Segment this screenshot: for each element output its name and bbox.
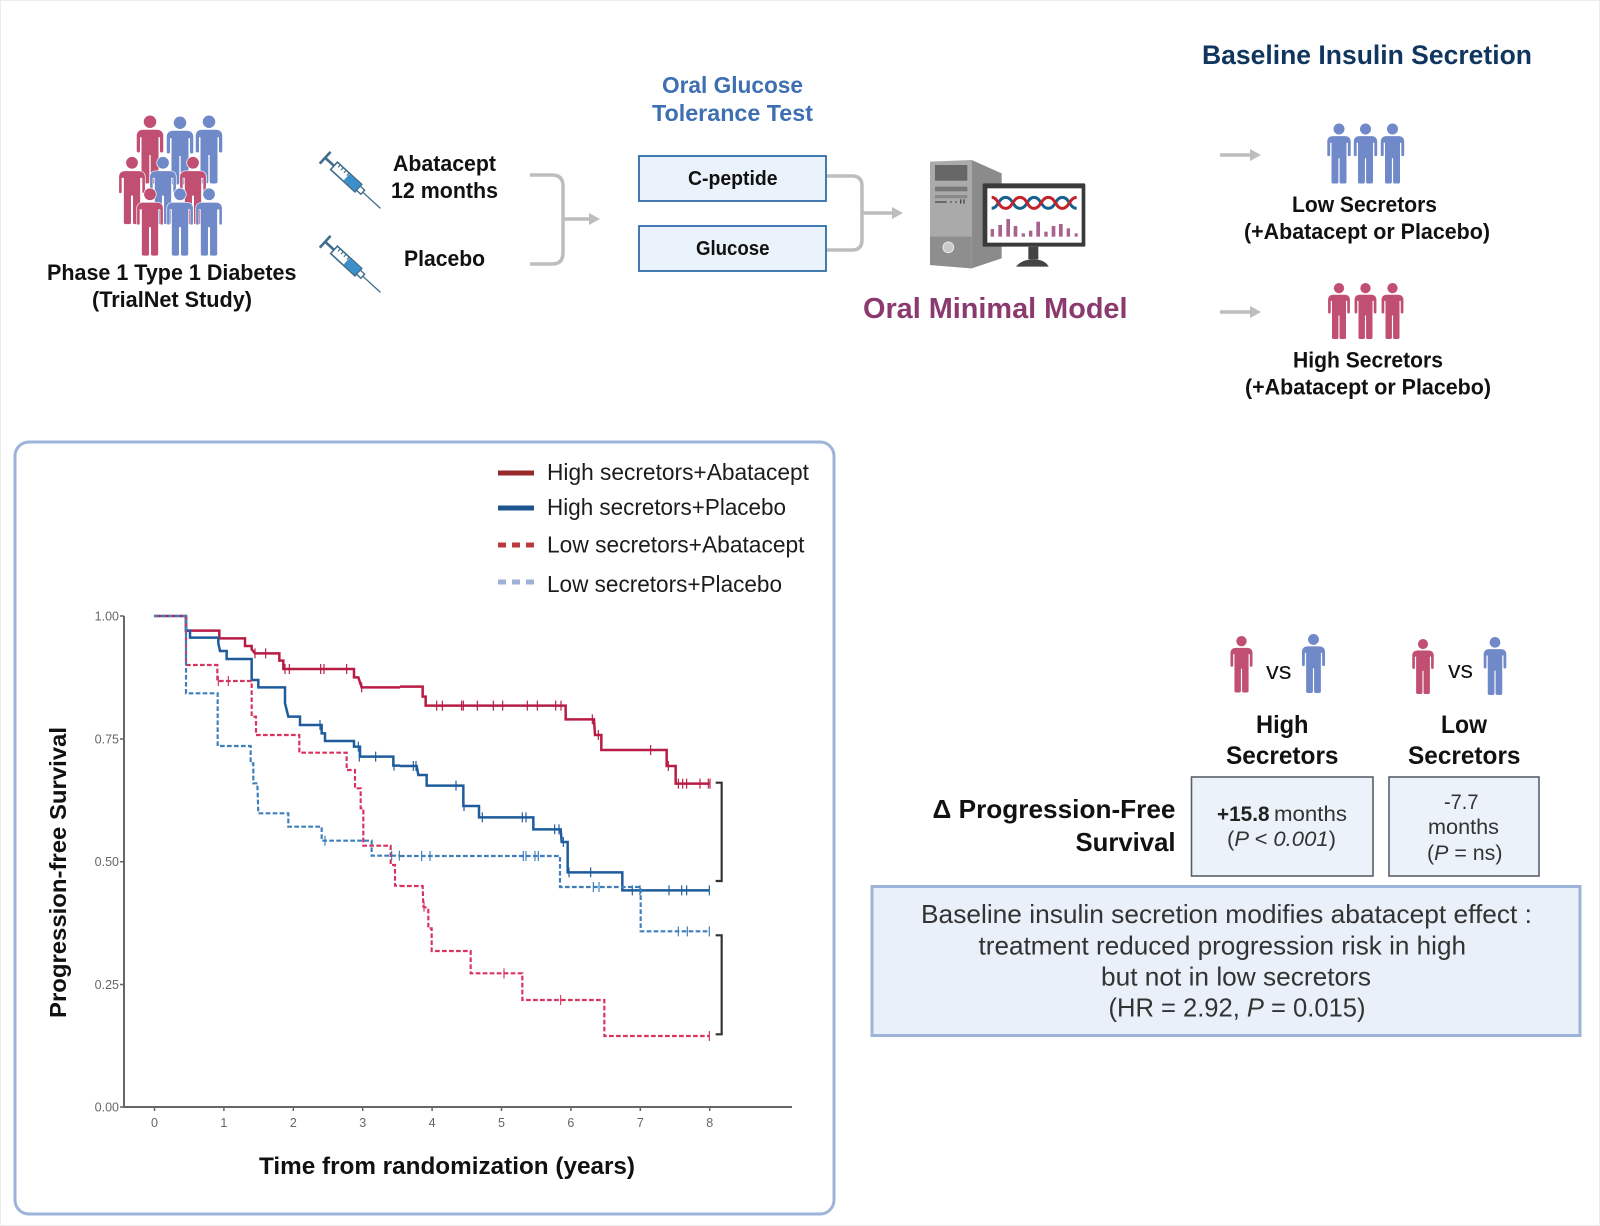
chart axes: 6 [567, 1116, 574, 1130]
heading: high secretors column [1226, 711, 1338, 770]
heading: high secretors column: High [1256, 711, 1308, 739]
arrow: OGTT to model [827, 176, 903, 250]
legend: High secretors+Abatacept [547, 459, 810, 485]
bracket: low secretors comparison [716, 935, 722, 1034]
chart axes: 0.25 [95, 978, 119, 992]
chart axes: 4 [429, 1116, 436, 1130]
y axis title: Progression-free Survival [45, 727, 71, 1018]
bracket: high secretors comparison [716, 783, 722, 881]
callout: conclusion [872, 886, 1580, 1036]
chart axes: 7 [637, 1116, 644, 1130]
row label: delta progression-free survival [932, 794, 1176, 857]
text: study population: (TrialNet Study) [92, 287, 252, 312]
chart axes: 8 [706, 1116, 713, 1130]
chart axes: 2 [290, 1116, 297, 1130]
text: abatacept arm: 12 months [391, 178, 498, 203]
box: high secretors result: +15.8 [1217, 803, 1270, 826]
icon: high secretors abatacept vs placebo [1230, 634, 1325, 693]
chart axes: 1.00 [95, 610, 119, 624]
box: high secretors result: months [1274, 803, 1347, 826]
heading: oral glucose tolerance test: Oral Glucose [662, 72, 803, 98]
legend: Low secretors+Abatacept [547, 532, 805, 558]
heading: oral glucose tolerance test [652, 72, 813, 126]
curve: high secretors abatacept [154, 616, 710, 789]
icon: computer with monitor [930, 160, 1085, 268]
icon: crowd of patients [119, 116, 222, 256]
legend: Low secretors+Placebo [547, 571, 782, 597]
box: high secretors result: (P < 0.001) [1227, 828, 1336, 851]
icon: syringe placebo [320, 236, 386, 298]
callout: conclusion: Baseline insulin secretion modifies abatacept effect : [921, 899, 1532, 929]
arrow: to high secretors [1220, 306, 1261, 318]
text: abatacept arm [391, 151, 498, 203]
heading: oral glucose tolerance test: Tolerance Test [652, 100, 813, 126]
arrow: treatment arms to OGTT [530, 175, 600, 264]
icon: high secretors abatacept vs placebo: vs [1266, 658, 1292, 685]
icon: high secretors [1328, 283, 1403, 339]
curve: low secretors abatacept [186, 616, 709, 1041]
text: low secretors [1244, 192, 1490, 244]
callout: conclusion: treatment reduced progression risk in high [978, 930, 1466, 960]
row label: delta progression-free survival: Survival [1076, 827, 1176, 857]
panel: survival chart [15, 442, 834, 1214]
text: low secretors: Low Secretors [1292, 192, 1437, 217]
text: placebo arm: Placebo [404, 246, 485, 271]
callout: conclusion: but not in low secretors [1101, 962, 1371, 992]
chart axes: 0.50 [95, 855, 119, 869]
text: high secretors: (+Abatacept or Placebo) [1245, 374, 1491, 400]
heading: low secretors column: Low [1441, 711, 1487, 739]
box: low secretors result [1389, 777, 1539, 876]
text: high secretors: High Secretors [1293, 348, 1443, 372]
heading: high secretors column: Secretors [1226, 742, 1338, 770]
text: study population: Phase 1 Type 1 Diabetes [47, 260, 296, 285]
chart axes: 5 [498, 1116, 505, 1130]
row label: delta progression-free survival: Δ Progression-Free [932, 794, 1176, 824]
curve: high secretors placebo [186, 616, 709, 895]
box: C-peptide [639, 156, 826, 201]
box: glucose: Glucose [696, 238, 770, 260]
icon: low secretors abatacept vs placebo [1412, 637, 1506, 695]
chart axes: 1 [220, 1116, 227, 1130]
heading: low secretors column: Secretors [1408, 742, 1520, 770]
box: glucose [639, 226, 826, 271]
chart axes: 0 [151, 1116, 158, 1130]
heading: oral minimal model: Oral Minimal Model [863, 293, 1128, 325]
box: high secretors result [1192, 777, 1373, 876]
text: low secretors: (+Abatacept or Placebo) [1244, 219, 1490, 244]
text: study population [47, 260, 296, 312]
chart axes: 0.75 [95, 732, 119, 746]
box: low secretors result: months [1428, 816, 1499, 839]
icon: low secretors abatacept vs placebo: vs [1448, 657, 1473, 684]
callout: conclusion: (HR = 2.92, P = 0.015) [1108, 992, 1366, 1022]
text: high secretors [1245, 348, 1491, 400]
x axis title: Time from randomization (years) [259, 1153, 635, 1180]
icon: low secretors [1327, 124, 1404, 184]
chart axes: 3 [359, 1116, 366, 1130]
box: low secretors result: (P = ns) [1427, 842, 1502, 865]
box: low secretors result: -7.7 [1444, 791, 1478, 814]
icon: syringe abatacept [320, 152, 386, 214]
chart axes [95, 610, 792, 1130]
arrow: to low secretors [1220, 149, 1261, 161]
heading: low secretors column [1408, 711, 1520, 770]
chart axes: 0.00 [95, 1100, 119, 1114]
box: C-peptide: C-peptide [688, 168, 778, 190]
legend: High secretors+Placebo [547, 494, 786, 520]
text: abatacept arm: Abatacept [393, 151, 497, 176]
curve: low secretors placebo [154, 616, 709, 936]
heading: baseline insulin secretion: Baseline Insulin Secretion [1202, 40, 1532, 70]
legend [498, 459, 810, 597]
